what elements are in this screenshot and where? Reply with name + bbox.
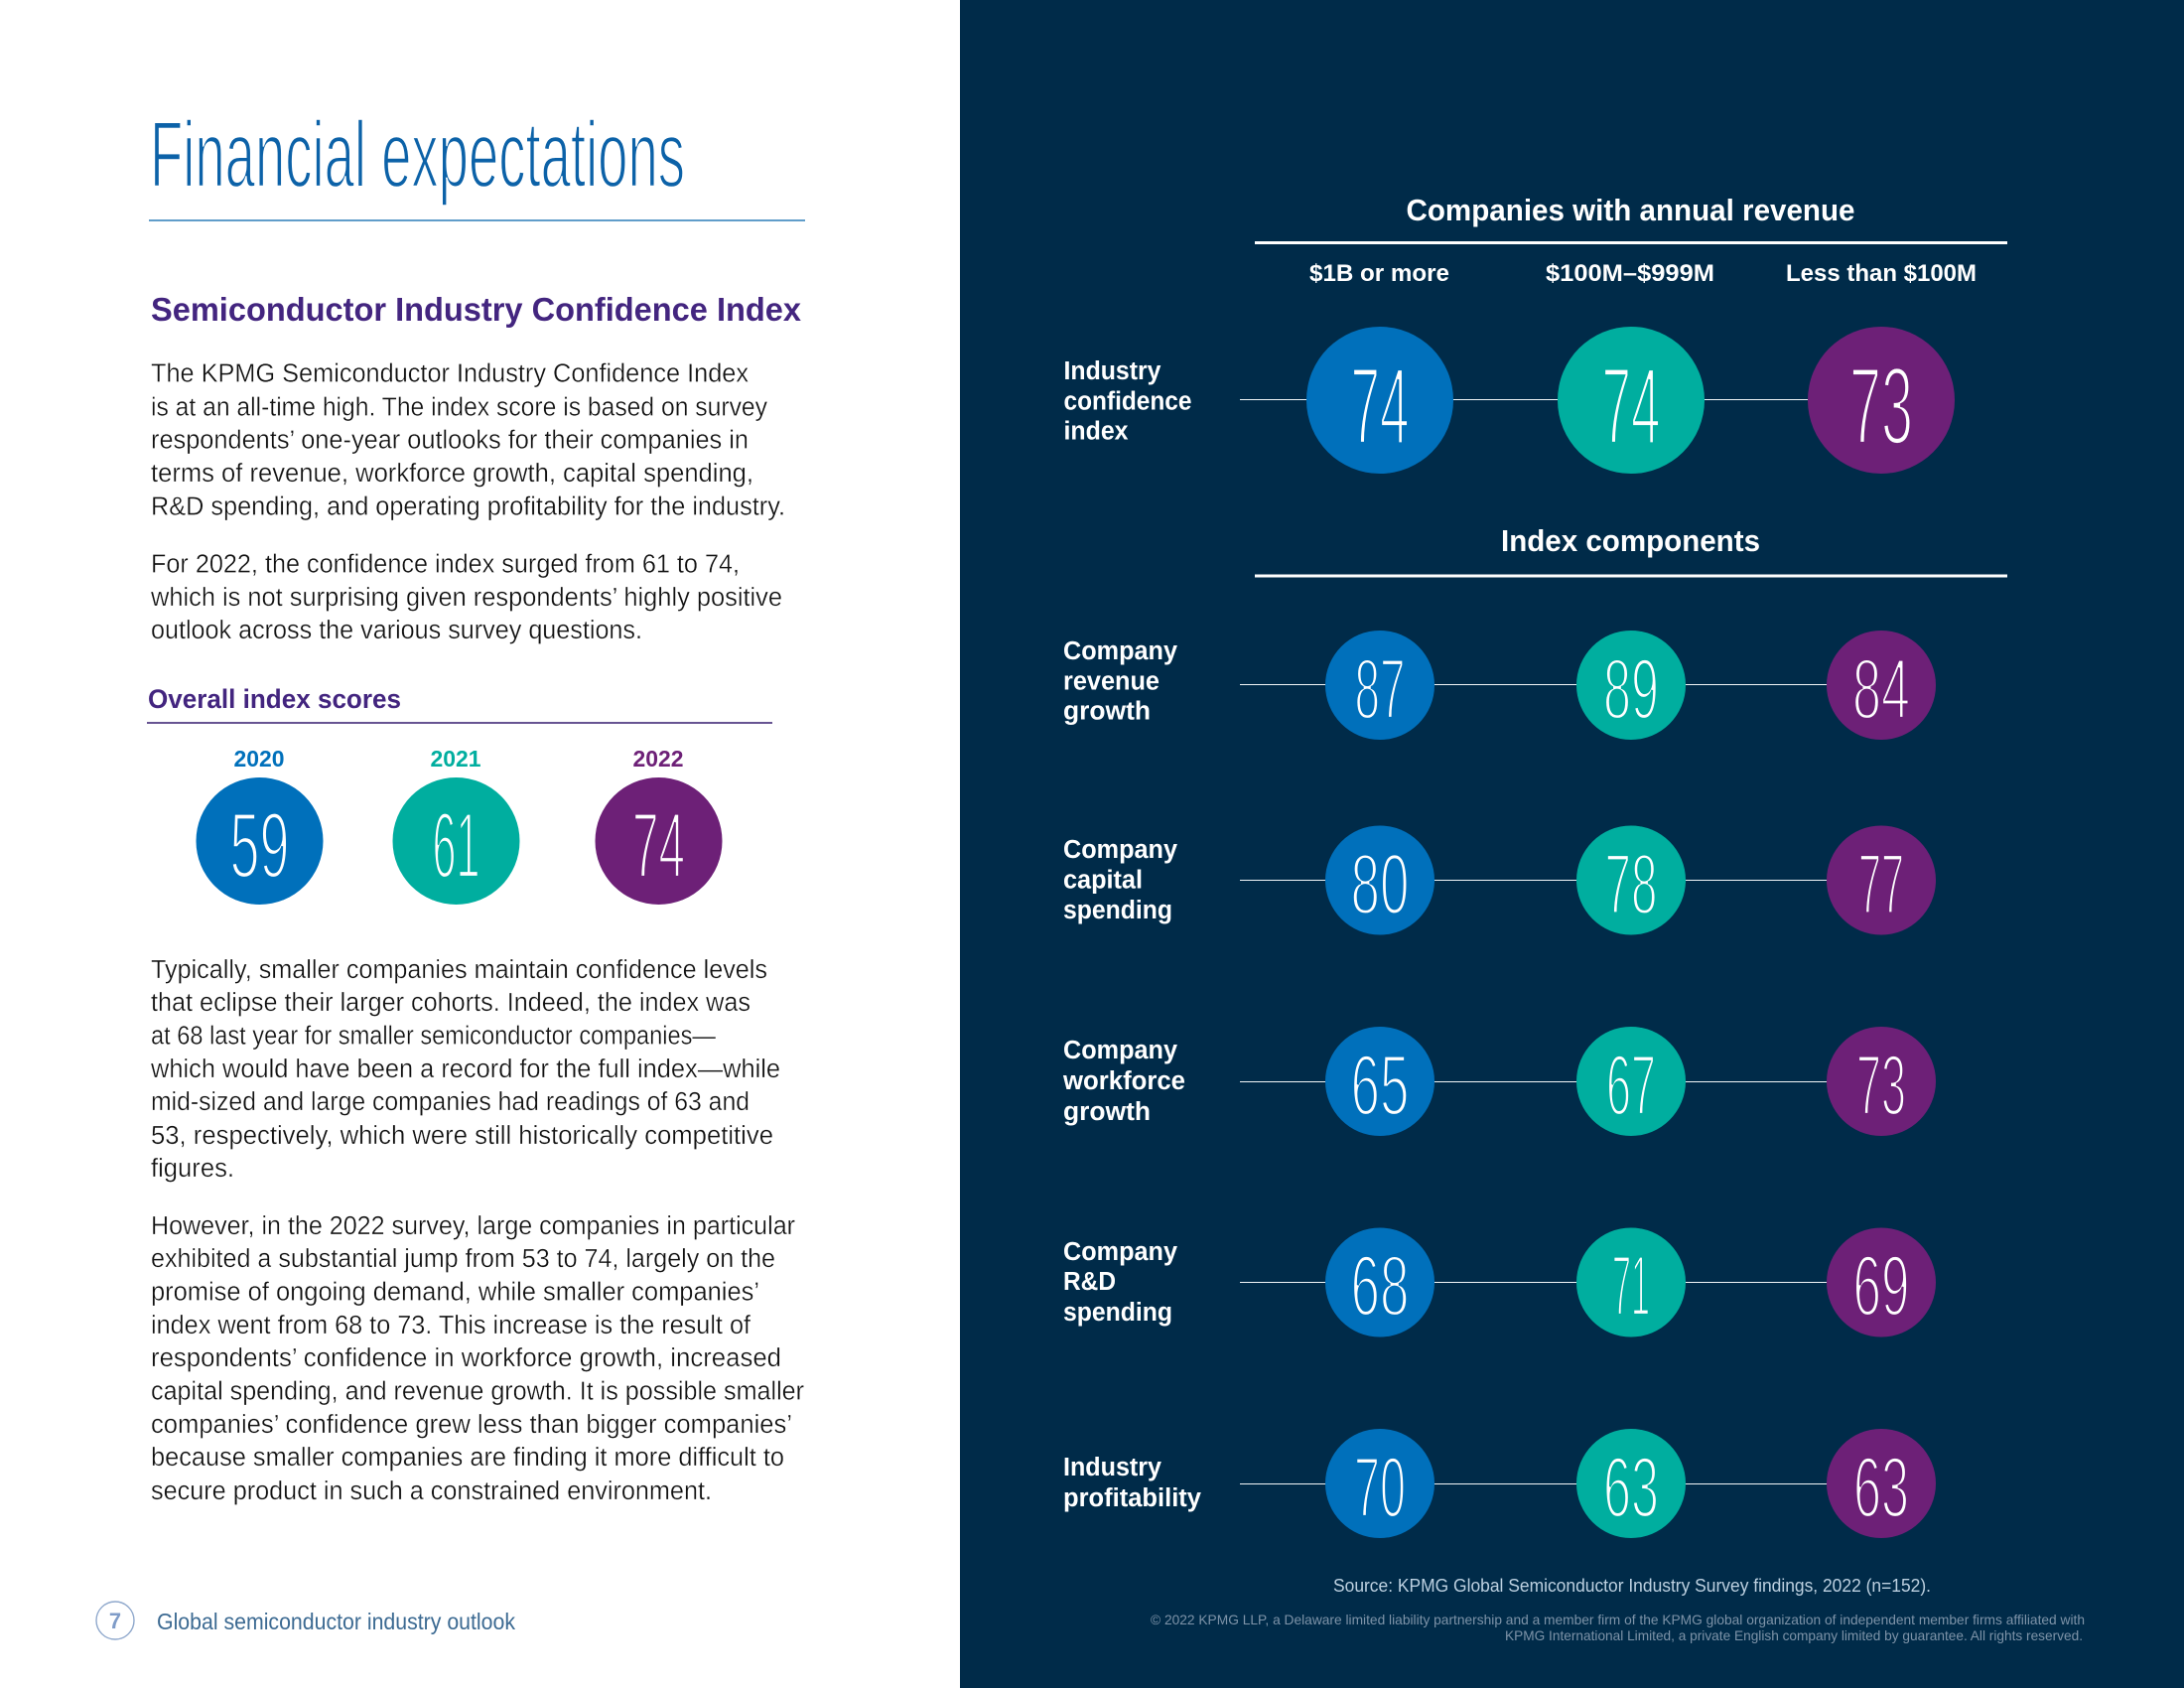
row: Company workforce growth: 67 xyxy=(1606,1039,1656,1134)
row: Company capital spending xyxy=(1063,826,1936,935)
row: Company R&D spending: 71 xyxy=(1612,1239,1650,1335)
text block: 2022 surge paragraph: which is not surprising given respondents’ highly positive xyxy=(150,584,782,612)
row: Industry profitability: 63 xyxy=(1853,1440,1909,1535)
text block: 2022 survey paragraph: promise of ongoing demand, while smaller companies’ xyxy=(151,1279,759,1307)
score: 2022 xyxy=(596,746,723,905)
icon: page number xyxy=(96,1602,134,1639)
row: Company workforce growth: Company xyxy=(1063,1037,1178,1064)
page footer xyxy=(96,1602,515,1639)
text block: 2022 surge paragraph: outlook across the various survey questions. xyxy=(151,617,642,644)
column headers xyxy=(1309,260,1977,287)
text block: smaller companies paragraph: 53, respectively, which were still historically competitive xyxy=(151,1122,773,1150)
text block: 2022 surge paragraph: For 2022, the confidence index surged from 61 to 74, xyxy=(151,550,740,578)
row: Company revenue growth: 87 xyxy=(1354,641,1406,737)
row: Industry confidence index: index xyxy=(1064,417,1128,445)
text block: 2022 survey paragraph: index went from 68 to 73. This increase is the result of xyxy=(151,1312,751,1339)
text block: smaller companies paragraph: which would have been a record for the full index—while xyxy=(150,1055,780,1083)
score: 2020 xyxy=(197,746,324,905)
icon: page number: 7 xyxy=(109,1609,121,1633)
row: Company revenue growth: 89 xyxy=(1603,641,1659,737)
row: Company workforce growth: workforce xyxy=(1062,1067,1185,1095)
heading: Companies with annual revenue: Companies with annual revenue xyxy=(1406,193,1854,227)
score: 2022: 74 xyxy=(632,792,685,898)
row: Industry confidence index: Industry xyxy=(1064,357,1161,385)
row: Company revenue growth: growth xyxy=(1063,697,1151,725)
row: Company R&D spending: Company xyxy=(1063,1238,1178,1266)
text block: 2022 survey paragraph: because smaller companies are finding it more difficult to xyxy=(151,1444,784,1472)
panel: left article column xyxy=(96,102,805,1639)
text block: 2022 survey paragraph: respondents’ confidence in workforce growth, increased xyxy=(151,1344,781,1372)
text block: smaller companies paragraph: that eclipse their larger cohorts. Indeed, the index was xyxy=(151,989,751,1017)
row: Company capital spending: spending xyxy=(1063,897,1172,924)
row: Company revenue growth: revenue xyxy=(1063,667,1160,695)
text block: 2022 survey paragraph: capital spending, and revenue growth. It is possible smaller xyxy=(151,1378,804,1406)
text block: smaller companies paragraph xyxy=(150,956,780,1183)
text block: intro paragraph: R&D spending, and operating profitability for the industry. xyxy=(151,492,785,520)
row: Company revenue growth xyxy=(1063,631,1936,740)
text block: intro paragraph xyxy=(151,359,785,520)
score: 2021: 2021 xyxy=(431,746,481,772)
text block: intro paragraph: terms of revenue, workforce growth, capital spending, xyxy=(151,460,753,488)
row: Industry confidence index: 74 xyxy=(1350,346,1410,468)
row: Company R&D spending: spending xyxy=(1063,1299,1172,1327)
row: Industry profitability: Industry xyxy=(1063,1454,1162,1481)
row: Company capital spending: 77 xyxy=(1858,837,1904,932)
row: Industry profitability xyxy=(1063,1429,1936,1538)
text block: 2022 surge paragraph xyxy=(150,550,782,644)
heading: Semiconductor Industry Confidence Index: Semiconductor Industry Confidence Index xyxy=(151,292,801,329)
footer text: Global semiconductor industry outlook xyxy=(157,1609,515,1634)
copyright note xyxy=(1151,1612,2085,1643)
column headers: $1B or more xyxy=(1309,260,1449,287)
source note: Source: KPMG Global Semiconductor Industry Survey findings, 2022 (n=152). xyxy=(1333,1576,1931,1596)
text block: smaller companies paragraph: at 68 last year for smaller semiconductor companies— xyxy=(151,1023,716,1051)
score: 2020: 2020 xyxy=(234,746,284,772)
row: Company capital spending: 78 xyxy=(1604,837,1658,932)
row: Company R&D spending: 69 xyxy=(1852,1239,1910,1335)
text block: 2022 survey paragraph xyxy=(151,1212,804,1505)
row: Company workforce growth xyxy=(1062,1027,1936,1136)
row: Company capital spending: 80 xyxy=(1350,837,1410,932)
row: Industry confidence index: 74 xyxy=(1602,346,1660,468)
chart: overall index scores by year xyxy=(197,746,723,905)
text block: 2022 survey paragraph: companies’ confidence grew less than bigger companies’ xyxy=(151,1411,792,1439)
title: Financial expectations xyxy=(150,102,685,208)
text block: intro paragraph: The KPMG Semiconductor Industry Confidence Index xyxy=(151,359,749,387)
column headers: Less than $100M xyxy=(1786,260,1977,287)
row: Industry profitability: 70 xyxy=(1354,1440,1406,1535)
row: Company workforce growth: growth xyxy=(1063,1098,1151,1126)
text block: intro paragraph: respondents’ one-year outlooks for their companies in xyxy=(151,427,749,455)
text block: 2022 survey paragraph: exhibited a substantial jump from 53 to 74, largely on the xyxy=(151,1245,775,1273)
copyright note: © 2022 KPMG LLP, a Delaware limited liability partnership and a member firm of the KPMG global organization of independent member firms affiliated with xyxy=(1151,1612,2085,1627)
row: Company revenue growth: Company xyxy=(1063,637,1178,665)
row: Industry confidence index: 73 xyxy=(1849,346,1913,468)
score: 2020: 59 xyxy=(230,792,290,898)
row: Company R&D spending: 68 xyxy=(1350,1239,1410,1335)
row: Company workforce growth: 65 xyxy=(1350,1039,1410,1134)
row: Company R&D spending xyxy=(1063,1227,1936,1336)
heading: Index components: Index components xyxy=(1501,523,1760,558)
row: Industry confidence index: confidence xyxy=(1064,387,1191,415)
panel: dark confidence index chart xyxy=(960,0,2184,1688)
score: 2021: 61 xyxy=(433,792,480,898)
row: Company workforce growth: 73 xyxy=(1856,1039,1906,1134)
text block: smaller companies paragraph: figures. xyxy=(151,1155,234,1183)
text block: 2022 survey paragraph: However, in the 2022 survey, large companies in particular xyxy=(151,1212,795,1240)
copyright note: KPMG International Limited, a private English company limited by guarantee. All rights reserved. xyxy=(1505,1627,2083,1643)
row: Company revenue growth: 84 xyxy=(1852,641,1910,737)
row: Company capital spending: capital xyxy=(1063,866,1143,894)
text block: smaller companies paragraph: Typically, smaller companies maintain confidence levels xyxy=(151,956,767,984)
heading: Overall index scores: Overall index scores xyxy=(148,684,401,714)
row: Industry profitability: profitability xyxy=(1063,1484,1202,1512)
column headers: $100M–$999M xyxy=(1546,260,1714,287)
row: Company capital spending: Company xyxy=(1063,836,1178,864)
text block: smaller companies paragraph: mid-sized and large companies had readings of 63 and xyxy=(151,1088,750,1116)
score: 2022: 2022 xyxy=(633,746,683,772)
text block: 2022 survey paragraph: secure product in such a constrained environment. xyxy=(151,1477,712,1505)
row: Industry profitability: 63 xyxy=(1603,1440,1659,1535)
row: Industry confidence index xyxy=(1064,327,1955,474)
text block: intro paragraph: is at an all-time high. The index score is based on survey xyxy=(151,393,767,421)
row: Company R&D spending: R&D xyxy=(1063,1268,1116,1296)
score: 2021 xyxy=(393,746,520,905)
